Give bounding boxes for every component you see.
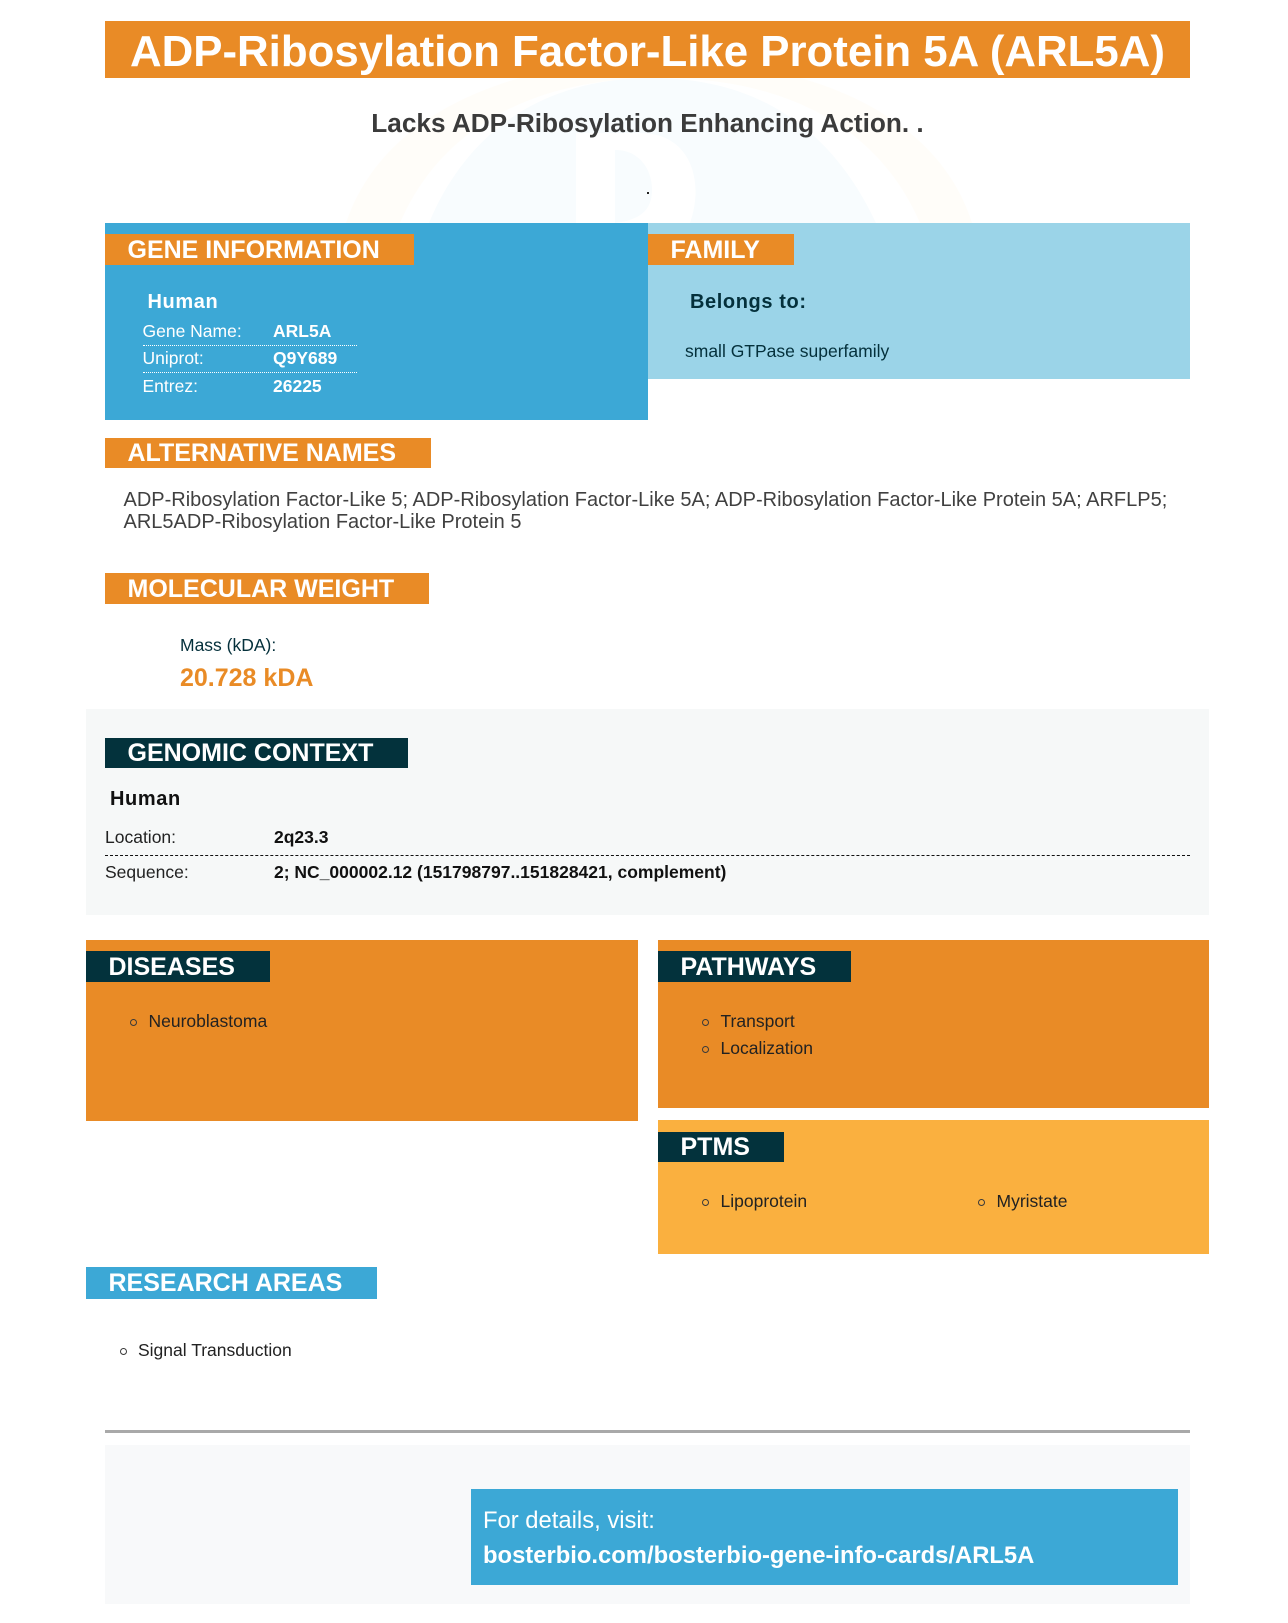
mass value: 20.728 kDA [180,664,313,692]
heading: family [648,234,794,265]
callout: details link [471,1489,1178,1585]
subtitle: Lacks ADP-Ribosylation Enhancing Action. . [371,108,924,138]
heading: pathways [658,951,851,982]
family value: small GTPase superfamily [685,341,889,361]
species: human: Human [148,291,218,313]
alternative names text: ADP-Ribosylation Factor-Like 5; ADP-Ribosylation Factor-Like 5A; ADP-Ribosylation Factor-Like Protein 5A; ARFLP5; [124,489,1167,511]
title: ADP-Ribosylation Factor-Like Protein 5A (ARL5A) [130,27,1165,76]
list item: localization: Localization [720,1038,813,1058]
field: gene name: Gene Name: [142,321,242,341]
list item: signal transduction: Signal Transduction [138,1340,292,1360]
panel: ptms [658,1120,1209,1254]
field: gene name [142,319,356,346]
alternative names text [124,489,1167,533]
list item: neuroblastoma: Neuroblastoma [148,1011,267,1031]
mass label: Mass (kDA): [180,635,276,655]
field: sequence: 2; NC_000002.12 (151798797..151828421, complement) [274,862,726,882]
heading: diseases: DISEASES [108,953,235,981]
details label: For details, visit: [483,1507,655,1534]
field: uniprot: Uniprot: [142,348,204,368]
heading: research areas: RESEARCH AREAS [108,1269,342,1297]
field: entrez: 26225 [273,376,322,396]
heading: molecular weight: MOLECULAR WEIGHT [128,575,394,603]
list item: lipoprotein: Lipoprotein [720,1191,807,1211]
field: entrez [142,376,322,396]
heading: family: FAMILY [670,236,760,264]
field: gene name: ARL5A [273,321,331,341]
panel: diseases [86,940,638,1121]
belongs to label: Belongs to: [690,291,807,313]
field: uniprot [142,346,356,373]
panel: gene information [105,223,648,420]
heading: ptms: PTMS [680,1133,750,1161]
field: entrez: Entrez: [142,376,198,396]
details url: bosterbio.com/bosterbio-gene-info-cards/ARL5A [483,1542,1034,1569]
field: location [105,825,1190,856]
list item: myristate: Myristate [996,1191,1067,1211]
alternative names text: ARL5ADP-Ribosylation Factor-Like Protein 5 [124,511,521,533]
panel: genomic context [86,709,1209,915]
field: sequence: Sequence: [105,862,189,882]
heading: alternative names: ALTERNATIVE NAMES [128,439,396,467]
heading: genomic context: GENOMIC CONTEXT [128,739,373,767]
panel: family [648,223,1190,379]
field: location: Location: [105,827,176,847]
panel: pathways [658,940,1209,1108]
field: location: 2q23.3 [274,827,328,847]
species: human: Human [110,788,181,810]
list item: transport: Transport [720,1011,795,1031]
panel: footer [105,1445,1190,1604]
field: uniprot: Q9Y689 [273,348,337,368]
small dot [647,192,649,194]
heading: diseases [86,951,270,982]
heading: pathways: PATHWAYS [680,953,816,981]
watermark logo [0,0,1288,223]
heading: ptms [658,1132,784,1162]
heading: gene information: GENE INFORMATION [128,236,380,264]
